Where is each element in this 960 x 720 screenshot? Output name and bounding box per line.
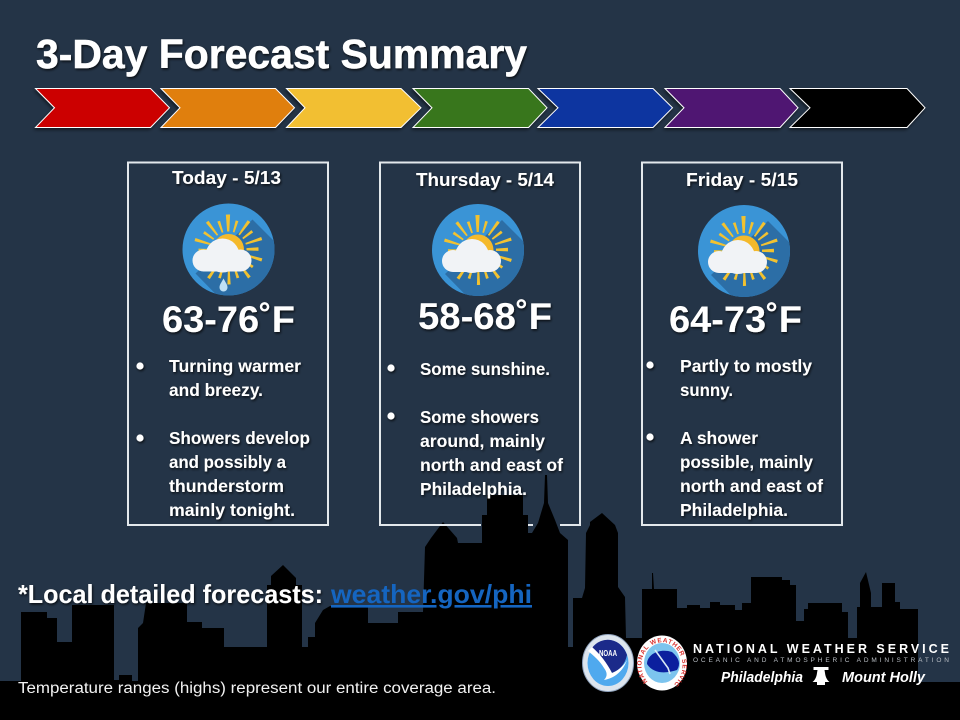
icon: sun, cloud and rain drop bbox=[182, 204, 300, 322]
bullet list: friday: sunny. bbox=[680, 380, 733, 400]
title: 3-Day Forecast Summary bbox=[36, 31, 527, 77]
panel: thursday bbox=[380, 162, 580, 525]
icon: sun and cloud bbox=[698, 205, 816, 323]
bullet list: friday: A shower bbox=[680, 428, 758, 448]
chevron arrow row bbox=[36, 88, 925, 128]
bullet list: today: thunderstorm bbox=[169, 476, 284, 496]
logo: NOAA: NOAA bbox=[599, 649, 617, 658]
heading: friday: Friday - 5/15 bbox=[686, 170, 798, 190]
logo text: National Weather Service bbox=[693, 642, 949, 664]
bullet list: today: Showers develop bbox=[169, 428, 310, 448]
local forecast callout bbox=[18, 579, 532, 609]
temperature: friday: 64-73˚F bbox=[669, 299, 802, 340]
bullet list: thursday: around, mainly bbox=[420, 431, 545, 451]
temperature: thursday: 58-68˚F bbox=[418, 296, 552, 337]
bullet list: today: Turning warmer bbox=[169, 356, 301, 376]
office name: Philadelphia: Philadelphia bbox=[721, 670, 803, 686]
icon: sun and cloud bbox=[432, 204, 550, 322]
panel: friday bbox=[642, 162, 842, 525]
bullet list: today bbox=[136, 356, 310, 520]
bullet list: today: and breezy. bbox=[169, 380, 263, 400]
heading: thursday: Thursday - 5/14 bbox=[416, 170, 554, 190]
bullet list: today: and possibly a bbox=[169, 452, 286, 472]
city skyline silhouette bbox=[0, 475, 960, 720]
bullet list: friday: Partly to mostly bbox=[680, 356, 812, 376]
heading: today: Today - 5/13 bbox=[172, 168, 281, 188]
footnote: Temperature ranges (highs) represent our entire coverage area. bbox=[18, 680, 496, 697]
bullet list: thursday: Philadelphia. bbox=[420, 479, 527, 499]
temperature: today: 63-76˚F bbox=[162, 299, 295, 340]
logo text: National Weather Service: NATIONAL WEATHER SERVICE bbox=[693, 642, 949, 656]
bullet list: friday: possible, mainly bbox=[680, 452, 813, 472]
agency line: OCEANIC AND ATMOSPHERIC ADMINISTRATION bbox=[693, 657, 949, 664]
logo: National Weather Service: NATIONAL WEATHER SERVICE bbox=[637, 638, 687, 687]
logo: National Weather Service bbox=[637, 636, 687, 690]
bullet list: thursday bbox=[387, 359, 563, 499]
bullet list: friday: north and east of bbox=[680, 476, 823, 496]
link text: weather.gov/phi bbox=[330, 579, 532, 609]
bullet list: thursday: Some sunshine. bbox=[420, 359, 550, 379]
icon: liberty bell bbox=[812, 667, 830, 685]
office name: Mount Holly: Mount Holly bbox=[842, 670, 926, 686]
logo: NOAA bbox=[582, 634, 634, 692]
panel: today bbox=[128, 162, 328, 525]
bullet list: friday: Philadelphia. bbox=[680, 500, 788, 520]
bullet list: today: mainly tonight. bbox=[169, 500, 295, 520]
bullet list: friday bbox=[646, 356, 823, 520]
bullet list: thursday: north and east of bbox=[420, 455, 563, 475]
bullet list: thursday: Some showers bbox=[420, 407, 539, 427]
local forecast callout: *Local detailed forecasts: bbox=[18, 579, 323, 609]
